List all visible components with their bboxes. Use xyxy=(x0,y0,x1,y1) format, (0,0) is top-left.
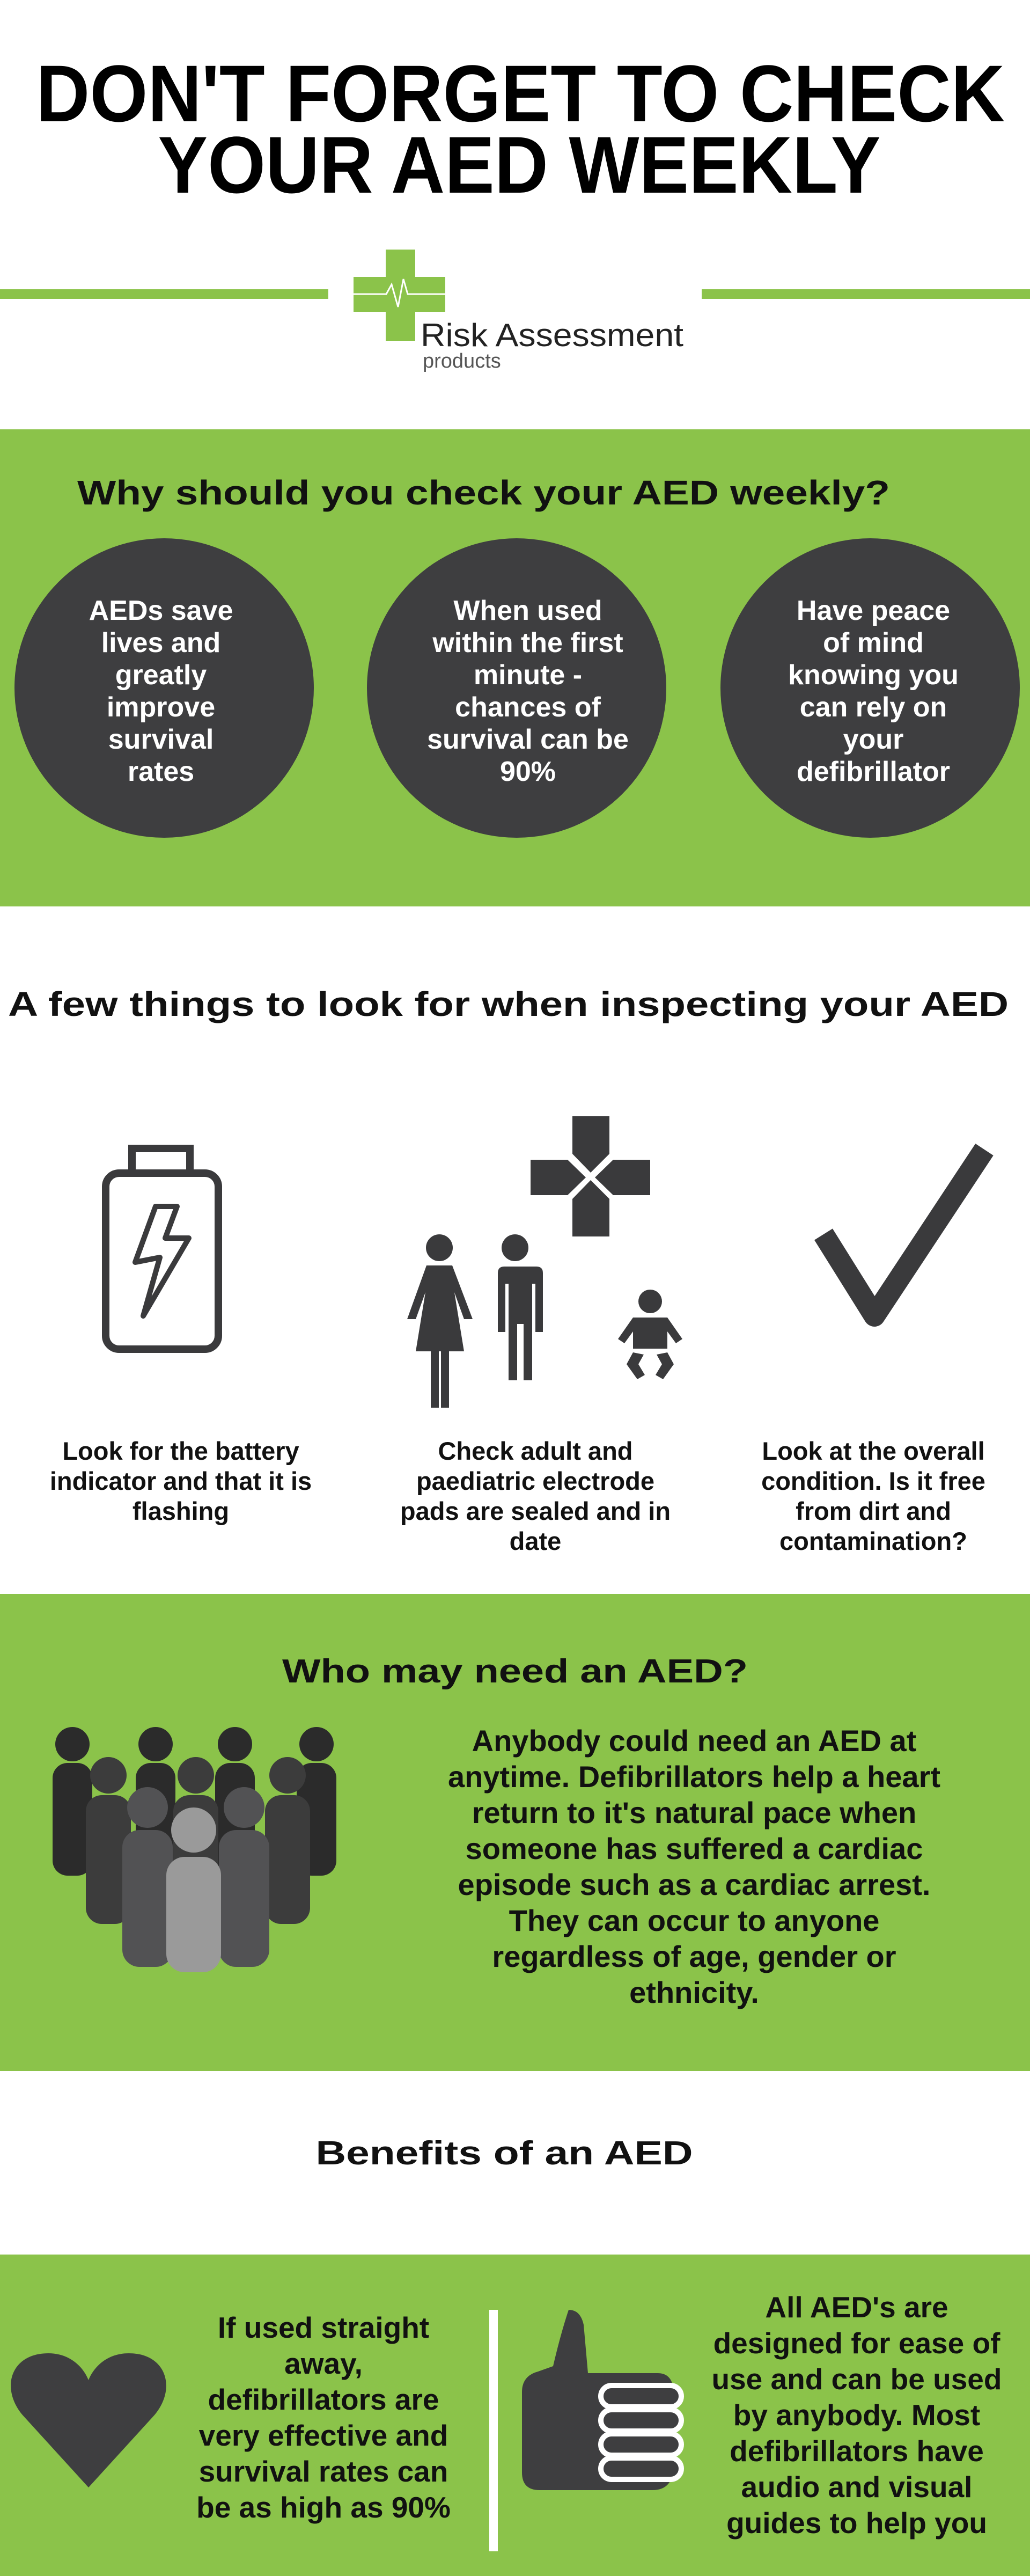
circle: saves lives xyxy=(14,538,314,838)
text: anybody: Anybody could need an AED at xyxy=(472,1724,916,1758)
logo band xyxy=(0,250,1030,372)
text: condition: from dirt and xyxy=(796,1497,951,1525)
icon: checkmark xyxy=(823,1150,984,1316)
circle: saves lives: survival xyxy=(108,724,214,755)
text: effective: away, xyxy=(284,2347,363,2380)
text: effective: defibrillators are xyxy=(208,2383,439,2416)
text: ease of use: designed for ease of xyxy=(713,2326,1000,2360)
heading: Who may need an AED? xyxy=(282,1653,748,1690)
logo text xyxy=(421,317,683,372)
text: effective: If used straight xyxy=(218,2311,429,2344)
text: ease of use: by anybody. Most xyxy=(733,2398,980,2432)
circle: first minute: When used xyxy=(453,595,602,626)
heading: benefits: Benefits of an AED xyxy=(315,2135,693,2172)
text: battery: indicator and that it is xyxy=(50,1467,312,1495)
text: battery: flashing xyxy=(133,1497,229,1525)
icon: battery xyxy=(106,1148,218,1349)
text: ease of use: All AED's are xyxy=(765,2290,948,2324)
text: anybody: regardless of age, gender or xyxy=(492,1940,896,1973)
circle: saves lives: rates xyxy=(128,756,194,787)
text: anybody: return to it's natural pace when xyxy=(472,1796,916,1829)
panel: benefits xyxy=(0,2255,1030,2576)
circle: first minute: 90% xyxy=(500,756,556,787)
text: condition: condition. Is it free xyxy=(761,1467,985,1495)
logo text: Risk Assessment xyxy=(421,317,683,353)
text: effective: survival rates can xyxy=(199,2455,448,2488)
logo text: products xyxy=(423,350,501,372)
icon: logo cross xyxy=(354,250,445,341)
circle: saves lives: improve xyxy=(107,692,215,723)
circle: first minute: within the first xyxy=(432,627,623,658)
panel: why check weekly xyxy=(0,429,1030,906)
text: ease of use: use and can be used xyxy=(711,2362,1002,2396)
icon: crowd xyxy=(53,1727,336,1972)
text: effective: very effective and xyxy=(199,2419,448,2452)
circle: peace of mind: knowing you xyxy=(788,660,959,691)
icon: thumbs up xyxy=(522,2310,681,2490)
icon: heart xyxy=(11,2353,166,2487)
text: ease of use: guides to help you xyxy=(726,2506,987,2540)
title: YOUR AED WEEKLY xyxy=(158,120,881,210)
circle: peace of mind: your xyxy=(843,724,903,755)
text: ease of use: defibrillators have xyxy=(730,2434,984,2468)
text: effective: be as high as 90% xyxy=(196,2491,451,2524)
circle: saves lives: greatly xyxy=(115,660,207,691)
title xyxy=(36,48,1005,210)
text: condition: contamination? xyxy=(779,1527,967,1555)
text: pads: date xyxy=(510,1527,561,1555)
text: anybody: ethnicity. xyxy=(629,1975,759,2009)
circle: peace of mind xyxy=(720,538,1020,838)
circle: peace of mind: defibrillator xyxy=(797,756,950,787)
text: anybody: someone has suffered a cardiac xyxy=(466,1832,923,1865)
heading: things to look for: A few things to look for when inspecting your AED xyxy=(8,985,1009,1023)
icon: family and medical cross xyxy=(407,1116,682,1408)
circle: first minute xyxy=(367,538,666,838)
circle: first minute: chances of xyxy=(455,692,601,723)
text: ease of use: audio and visual xyxy=(741,2470,972,2504)
circle: peace of mind: Have peace xyxy=(797,595,950,626)
heading: Why should you check your AED weekly? xyxy=(77,473,890,512)
panel: who may need an AED xyxy=(0,1594,1030,2071)
circle: first minute: minute - xyxy=(474,660,582,691)
circle: saves lives: lives and xyxy=(101,627,220,658)
circle: saves lives: AEDs save xyxy=(89,595,233,626)
circle: first minute: survival can be xyxy=(427,724,629,755)
text: pads: Check adult and xyxy=(438,1437,633,1465)
text: condition: Look at the overall xyxy=(762,1437,985,1465)
text: anybody: They can occur to anyone xyxy=(509,1904,879,1937)
circle: peace of mind: can rely on xyxy=(800,692,947,723)
text: battery: Look for the battery xyxy=(62,1437,299,1465)
text: pads: pads are sealed and in xyxy=(400,1497,671,1525)
text: anybody: episode such as a cardiac arrest. xyxy=(458,1868,930,1901)
circle: peace of mind: of mind xyxy=(823,627,924,658)
text: pads: paediatric electrode xyxy=(416,1467,654,1495)
text: anybody: anytime. Defibrillators help a heart xyxy=(448,1760,940,1794)
